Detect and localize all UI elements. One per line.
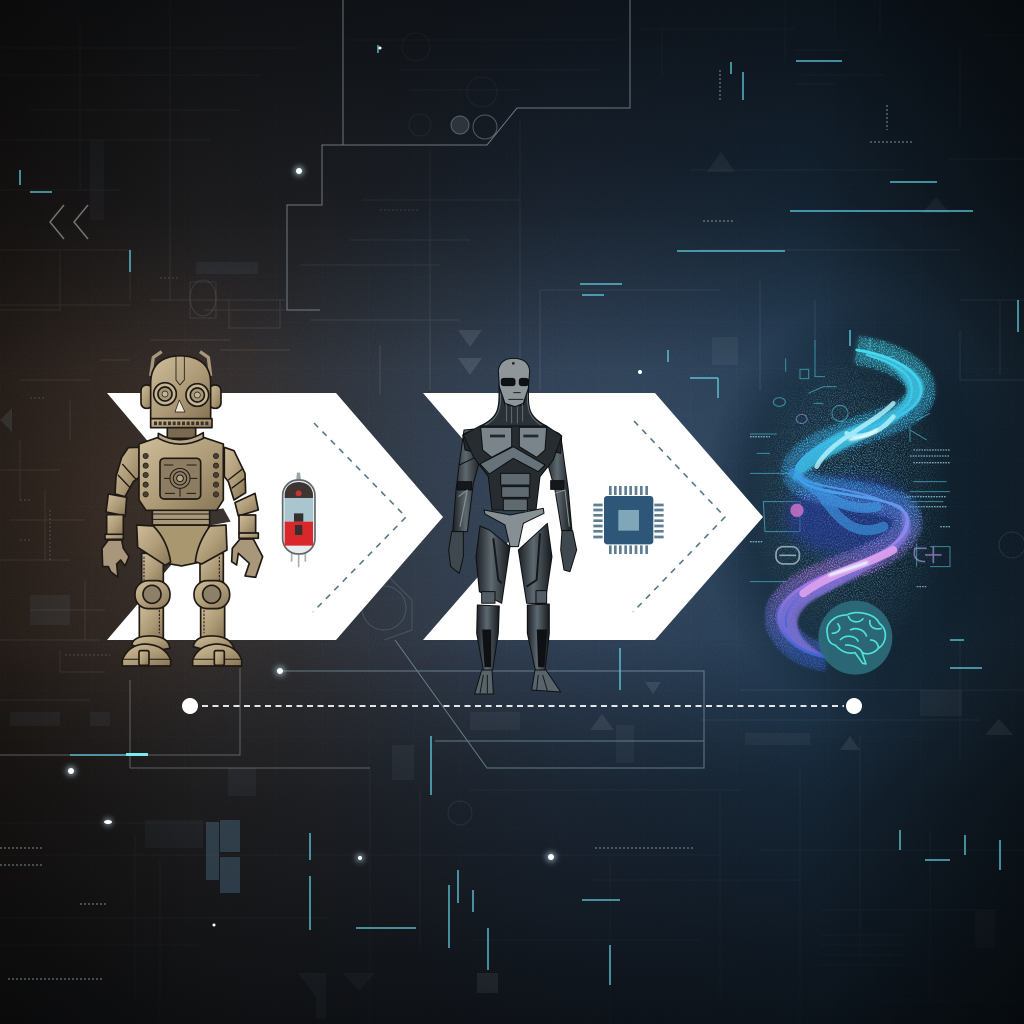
neck and cables xyxy=(480,383,547,426)
tube red section xyxy=(285,522,313,546)
thick cyan bar xyxy=(126,753,148,756)
shins xyxy=(477,604,549,670)
tube upper section xyxy=(285,482,313,498)
chest panel xyxy=(160,458,201,499)
thighs xyxy=(476,523,552,604)
AI swirl with neural data xyxy=(750,340,950,675)
rivets xyxy=(143,453,219,497)
data dust field xyxy=(750,340,950,660)
ears xyxy=(141,385,221,408)
timeline end node xyxy=(846,698,862,714)
tube middle section xyxy=(285,498,313,522)
chevron 1 xyxy=(107,393,443,640)
icon: brain in disc xyxy=(818,601,892,675)
sparse bright dots xyxy=(68,46,642,926)
antennae xyxy=(151,352,211,376)
swirl dust body xyxy=(779,350,921,657)
icon: microchip xyxy=(593,486,664,554)
faint HUD glyphs around swirl xyxy=(750,340,950,582)
lower circuit traces xyxy=(280,640,704,768)
chip pins xyxy=(593,486,664,554)
central cloud xyxy=(787,477,913,557)
faint circuit lines, top and centre xyxy=(0,0,1024,395)
upper ribbon xyxy=(793,350,924,482)
dashed chevron line 2 xyxy=(633,421,725,612)
lower ribbon xyxy=(776,510,911,657)
dot glows xyxy=(66,166,556,862)
skull xyxy=(498,358,530,407)
chevron outlines upper left xyxy=(50,205,88,239)
left arm xyxy=(102,447,139,577)
swirl glow xyxy=(779,350,921,657)
waist ribs xyxy=(152,509,210,525)
main circuit trace xyxy=(287,0,630,310)
faint circuit lines, bottom xyxy=(0,640,1024,1024)
faint circuit lines, left xyxy=(0,250,290,700)
tube electrodes xyxy=(294,513,303,535)
right arm xyxy=(224,447,263,577)
brain disc xyxy=(818,601,892,675)
chevron 2 xyxy=(423,393,763,640)
robot: vintage tin robot xyxy=(102,352,263,666)
ring details xyxy=(190,33,1024,825)
shadow behind waist xyxy=(208,508,231,525)
torso xyxy=(139,433,223,510)
torso xyxy=(463,426,562,511)
text-like data lines xyxy=(750,437,950,587)
feet xyxy=(122,636,242,666)
frame lines beneath timeline xyxy=(0,668,370,768)
filled discs by the trace xyxy=(451,115,497,139)
neck xyxy=(167,428,196,438)
pelvis band xyxy=(484,508,544,547)
icon: vacuum tube xyxy=(283,473,315,567)
faux data labels xyxy=(0,70,912,979)
tube glass xyxy=(283,480,315,554)
pink node xyxy=(790,504,804,517)
chip body xyxy=(604,496,653,544)
faux data ticks xyxy=(20,210,420,655)
right arm xyxy=(545,430,577,572)
pelvis xyxy=(137,525,227,566)
tube tip xyxy=(296,473,301,482)
feet xyxy=(475,670,561,694)
legs xyxy=(135,553,230,638)
timeline xyxy=(182,698,862,714)
tube pins xyxy=(292,552,305,567)
swirl highlights xyxy=(830,430,877,575)
dashed chevron line 1 xyxy=(313,423,406,612)
timeline start node xyxy=(182,698,198,714)
swirl core ribbons xyxy=(779,350,921,657)
small panels xyxy=(10,140,995,948)
robot: metallic android xyxy=(449,358,577,694)
brain outline xyxy=(827,613,885,664)
blue data column xyxy=(206,820,240,893)
head xyxy=(151,356,212,428)
chip core xyxy=(618,510,639,531)
left arm xyxy=(449,428,482,573)
